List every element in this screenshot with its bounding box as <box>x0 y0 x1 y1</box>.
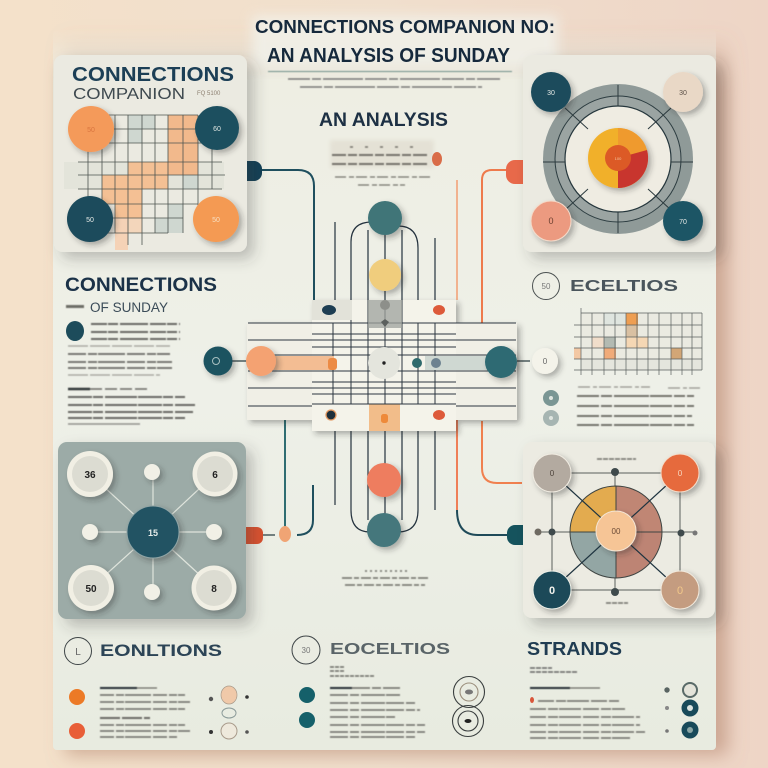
tiny caption: FQ 5100 <box>197 91 221 97</box>
grid shading <box>269 300 495 431</box>
button: tan bottom right <box>661 571 699 609</box>
node: top left: 36 <box>84 470 96 481</box>
button: teal bottom left: 0 <box>549 585 555 597</box>
icon: 50 <box>542 282 551 291</box>
button: teal bottom right: 70 <box>679 219 687 226</box>
node: dark teal left <box>204 346 232 376</box>
button: teal top right <box>195 106 239 150</box>
pie center: 00 <box>612 527 621 536</box>
side icons <box>664 683 698 738</box>
node: white right: 0 <box>543 357 548 366</box>
crossword grid <box>64 115 225 250</box>
text lines <box>577 387 700 425</box>
icon <box>64 638 92 664</box>
panel: hub and spoke <box>58 442 246 619</box>
icon <box>292 636 320 664</box>
icon: L <box>75 647 81 658</box>
connector tabs <box>238 160 537 545</box>
panel: target diagram <box>523 55 716 252</box>
section: strands <box>527 639 698 738</box>
title: CONNECTIONS COMPANION NO: <box>255 17 555 37</box>
central cross grid <box>204 201 558 547</box>
panel subheading: COMPANION <box>73 86 185 103</box>
connector lines <box>228 170 530 535</box>
button: orange top right: 0 <box>678 469 683 478</box>
button: teal top left <box>531 72 571 112</box>
small icons <box>543 390 559 426</box>
grid markers <box>322 300 445 423</box>
cross shape <box>247 300 517 431</box>
target center <box>588 128 648 188</box>
button: cream top right: 30 <box>679 90 687 97</box>
panel: pie diagram <box>523 442 715 618</box>
node: top right: 6 <box>212 470 218 481</box>
heading: an analysis: AN ANALYSIS <box>319 110 448 131</box>
panel: connections grid <box>54 55 247 252</box>
node: teal bottom <box>367 513 401 547</box>
button: coral bottom left <box>531 201 571 241</box>
vertical loop lines <box>335 222 435 532</box>
panel heading: CONNECTIONS <box>72 64 234 86</box>
text lines <box>330 688 425 737</box>
grid chart <box>574 308 702 375</box>
node: teal right <box>485 346 517 378</box>
node: top right <box>192 452 238 496</box>
heading: connections: CONNECTIONS <box>65 275 217 296</box>
button: orange bottom right: 50 <box>212 217 220 224</box>
caption <box>530 668 578 672</box>
small nodes <box>82 464 222 600</box>
button: orange bottom right <box>193 196 239 242</box>
button: teal bottom left: 50 <box>86 217 94 224</box>
button: gray top left: 0 <box>550 469 555 478</box>
caption <box>330 667 375 676</box>
title <box>255 17 555 67</box>
button: orange top right <box>661 454 699 492</box>
node: bottom left: 50 <box>85 584 97 595</box>
button: coral bottom left: 0 <box>548 216 554 226</box>
side icons <box>209 686 249 739</box>
button: tan bottom right: 0 <box>677 585 683 597</box>
node: bottom left <box>68 565 114 611</box>
caption <box>69 671 160 673</box>
text lines <box>100 688 190 737</box>
button: gray top left <box>533 454 571 492</box>
button: orange top left <box>68 106 114 152</box>
pie center <box>596 511 636 551</box>
panel captions <box>597 459 636 603</box>
left text block <box>66 321 195 424</box>
hub: 15 <box>148 528 158 538</box>
network dots <box>534 468 698 596</box>
button: cream top right <box>663 72 703 112</box>
pie chart <box>570 486 662 578</box>
analysis text block <box>330 140 442 185</box>
button: teal bottom left <box>533 571 571 609</box>
hub <box>127 506 179 558</box>
heading: EOCELTIOS <box>330 641 450 658</box>
node: orange left <box>246 346 276 376</box>
bullet icons <box>299 687 315 728</box>
button: teal top left: 30 <box>547 90 555 97</box>
node: white right <box>532 348 558 374</box>
icon <box>532 272 560 300</box>
button: teal bottom left <box>67 196 113 242</box>
node: bottom right: 8 <box>211 584 217 595</box>
center caption text <box>342 571 428 585</box>
text lines <box>530 688 645 738</box>
small marker <box>530 697 534 703</box>
node: coral bottom <box>367 463 401 497</box>
node: yellow <box>369 259 401 291</box>
node: teal top <box>368 201 402 235</box>
spokes <box>90 472 215 592</box>
section: ecletios <box>532 272 702 426</box>
target center: 100 <box>615 156 622 161</box>
section: eonltions <box>64 638 249 739</box>
node: bottom right <box>192 566 236 610</box>
subtitle text lines <box>268 72 512 87</box>
heading: EONLTIONS <box>100 642 222 660</box>
grid lines <box>248 300 516 431</box>
section: eocelttios <box>292 636 484 737</box>
network lines <box>538 472 695 592</box>
node: top left <box>67 451 113 497</box>
concentric rings <box>543 84 693 234</box>
caption <box>578 302 626 304</box>
ring icons <box>452 676 484 736</box>
bullet icons <box>69 689 85 739</box>
button: teal top right: 60 <box>213 126 221 133</box>
diagonal links <box>552 473 680 590</box>
title: AN ANALYSIS OF SUNDAY <box>267 45 511 67</box>
heading: ECELTIOS <box>570 278 678 295</box>
title glow <box>252 16 558 68</box>
button: teal bottom right <box>663 201 703 241</box>
icon: 30 <box>302 646 311 655</box>
button: orange top left: 50 <box>87 127 95 134</box>
subheading: of sunday: OF SUNDAY <box>90 300 168 315</box>
heading: STRANDS <box>527 639 622 659</box>
